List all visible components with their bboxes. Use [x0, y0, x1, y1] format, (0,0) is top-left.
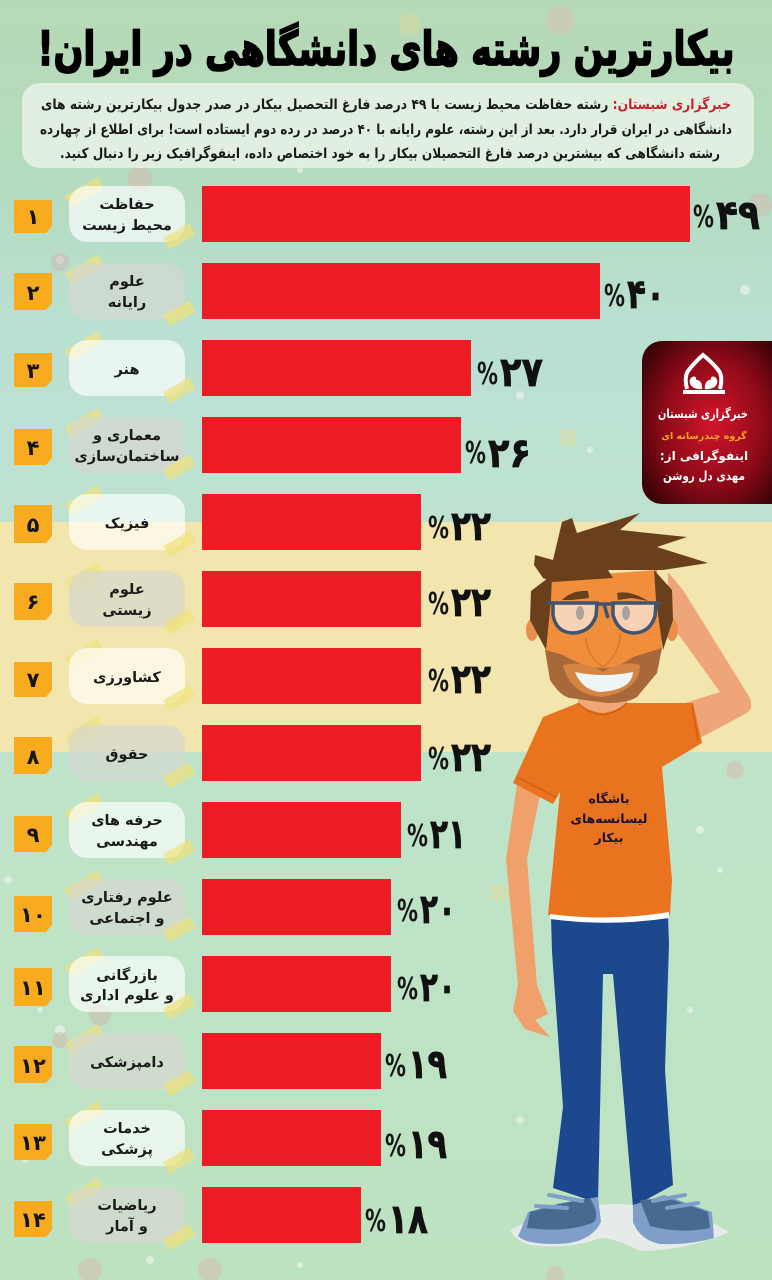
group name: گروه چندرسانه ای: [661, 430, 747, 442]
row 13: [14, 1101, 447, 1174]
row 3: [14, 331, 543, 404]
row 5: فیزیک: [105, 516, 149, 532]
row 2: ۲: [27, 281, 40, 305]
trousers: [551, 916, 673, 1207]
row 1: ۱: [27, 205, 39, 229]
row 2: علوم: [109, 274, 145, 290]
row 1: محیط زیست: [82, 218, 172, 234]
row 6: زیستی: [102, 603, 152, 619]
row 13: ۱۳: [20, 1131, 46, 1155]
row 6: %: [428, 587, 449, 622]
row 1: حفاظت: [99, 197, 155, 213]
row 3: ۳: [27, 359, 40, 383]
row 1: %: [693, 200, 714, 235]
row 9: مهندسی: [96, 834, 158, 850]
nose lines: [586, 633, 620, 667]
row 8: حقوق: [106, 747, 148, 763]
row 4: %: [465, 436, 486, 471]
row 1: [14, 177, 760, 250]
shirt line 1: باشگاه: [588, 791, 630, 806]
row 4: [14, 408, 531, 481]
shirt text: [570, 791, 648, 845]
smile: [575, 672, 633, 692]
row 4: ساختمان‌سازی: [75, 449, 179, 465]
row 4: ۲۶: [488, 429, 531, 477]
credit label: اینفوگرافی از:: [660, 449, 748, 464]
hair: [534, 513, 708, 582]
row 11: ۲۰: [420, 963, 456, 1011]
row 7: %: [428, 664, 449, 699]
intro text line 2: دانشگاهی در ایران قرار دارد. بعد از این رشته، علوم رایانه با ۴۰ درصد در رده دوم ایستاده است! برای اطلاع از چهارده: [40, 121, 732, 138]
row 11: %: [397, 972, 418, 1007]
undershirt: [550, 912, 669, 923]
row 12: دامپزشکی: [90, 1055, 164, 1071]
shirt seams: [517, 703, 698, 797]
row 6: [14, 562, 491, 635]
row 5: ۵: [27, 513, 40, 537]
row 9: ۲۱: [430, 810, 466, 858]
author name: مهدی دل روشن: [663, 468, 745, 483]
character illustration: [506, 513, 751, 1251]
row 7: ۲۲: [451, 655, 491, 703]
glasses: [547, 603, 661, 633]
row 13: ۱۹: [408, 1120, 447, 1168]
neck: [578, 690, 627, 712]
raised arm: [668, 572, 751, 738]
row 2: رایانه: [108, 295, 146, 311]
row 12: ۱۲: [20, 1054, 46, 1078]
beard: [545, 640, 662, 703]
row 14: ۱۴: [20, 1208, 46, 1232]
row 13: خدمات: [103, 1121, 151, 1137]
row 4: معماری و: [92, 428, 161, 444]
row 1: ۴۹: [716, 191, 760, 239]
row 9: ۹: [27, 823, 40, 847]
ears: [526, 619, 678, 641]
panel: agency credit: [642, 341, 772, 504]
t-shirt: [513, 703, 702, 918]
row 4: ۴: [27, 436, 40, 460]
side hair: [530, 570, 673, 650]
row 14: ریاضیات: [97, 1198, 157, 1214]
row 14: %: [365, 1204, 386, 1239]
intro text: خبرگزاری شبستان: رشته حفاظت محیط زیست با ۴۹ درصد فارغ التحصیل بیکار در صدر جدول بیکارترین رشته های: [41, 96, 731, 113]
row 11: ۱۱: [20, 976, 46, 1000]
row 12: [14, 1024, 447, 1097]
row 6: علوم: [109, 582, 145, 598]
row 13: پزشکی: [101, 1142, 153, 1158]
row 5: [14, 485, 491, 558]
row 10: و اجتماعی: [89, 911, 165, 927]
row 10: [14, 870, 456, 943]
row 12: ۱۹: [408, 1040, 447, 1088]
row 7: ۷: [27, 668, 40, 692]
row 6: ۲۲: [451, 578, 491, 626]
row 7: [14, 639, 491, 712]
row 13: %: [385, 1129, 406, 1164]
agency name: خبرگزاری شبستان: [658, 406, 748, 421]
row 5: ۲۲: [451, 502, 491, 550]
row 10: ۲۰: [420, 885, 456, 933]
row 14: [14, 1178, 428, 1251]
eyebrows: [562, 591, 648, 601]
row 3: ۲۷: [500, 348, 543, 396]
row 11: و علوم اداری: [80, 988, 174, 1004]
shoe right: [633, 1195, 714, 1244]
shirt line 3: بیکار: [594, 830, 623, 845]
row 2: ۴۰: [627, 270, 665, 318]
icon: agency logo: [683, 355, 725, 394]
row 12: %: [385, 1049, 406, 1084]
row 9: حرفه های: [91, 813, 163, 829]
row 10: علوم رفتاری: [81, 890, 173, 906]
face: [546, 570, 662, 668]
row 2: %: [604, 279, 625, 314]
row 8: ۲۲: [451, 733, 491, 781]
row 3: %: [477, 357, 498, 392]
row 6: ۶: [27, 590, 39, 614]
left arm: [506, 785, 550, 1037]
row 8: [14, 716, 491, 789]
row 14: و آمار: [105, 1217, 148, 1235]
row 14: ۱۸: [388, 1195, 428, 1243]
row 5: %: [428, 511, 449, 546]
shoe left: [518, 1195, 601, 1244]
row 11: [14, 947, 456, 1020]
row 9: %: [407, 819, 428, 854]
row 3: هنر: [114, 362, 140, 378]
shoe shadow: [510, 1204, 729, 1251]
row 8: ۸: [27, 745, 40, 769]
row 10: ۱۰: [20, 903, 46, 927]
panel: intro: [22, 83, 754, 168]
shirt line 2: لیسانسه‌های: [570, 811, 648, 826]
mouth area: [563, 664, 640, 697]
row 7: کشاورزی: [93, 670, 161, 686]
row 10: %: [397, 894, 418, 929]
row 9: [14, 793, 466, 866]
row 2: [14, 254, 665, 327]
row 11: بازرگانی: [96, 966, 158, 984]
row 8: %: [428, 742, 449, 777]
